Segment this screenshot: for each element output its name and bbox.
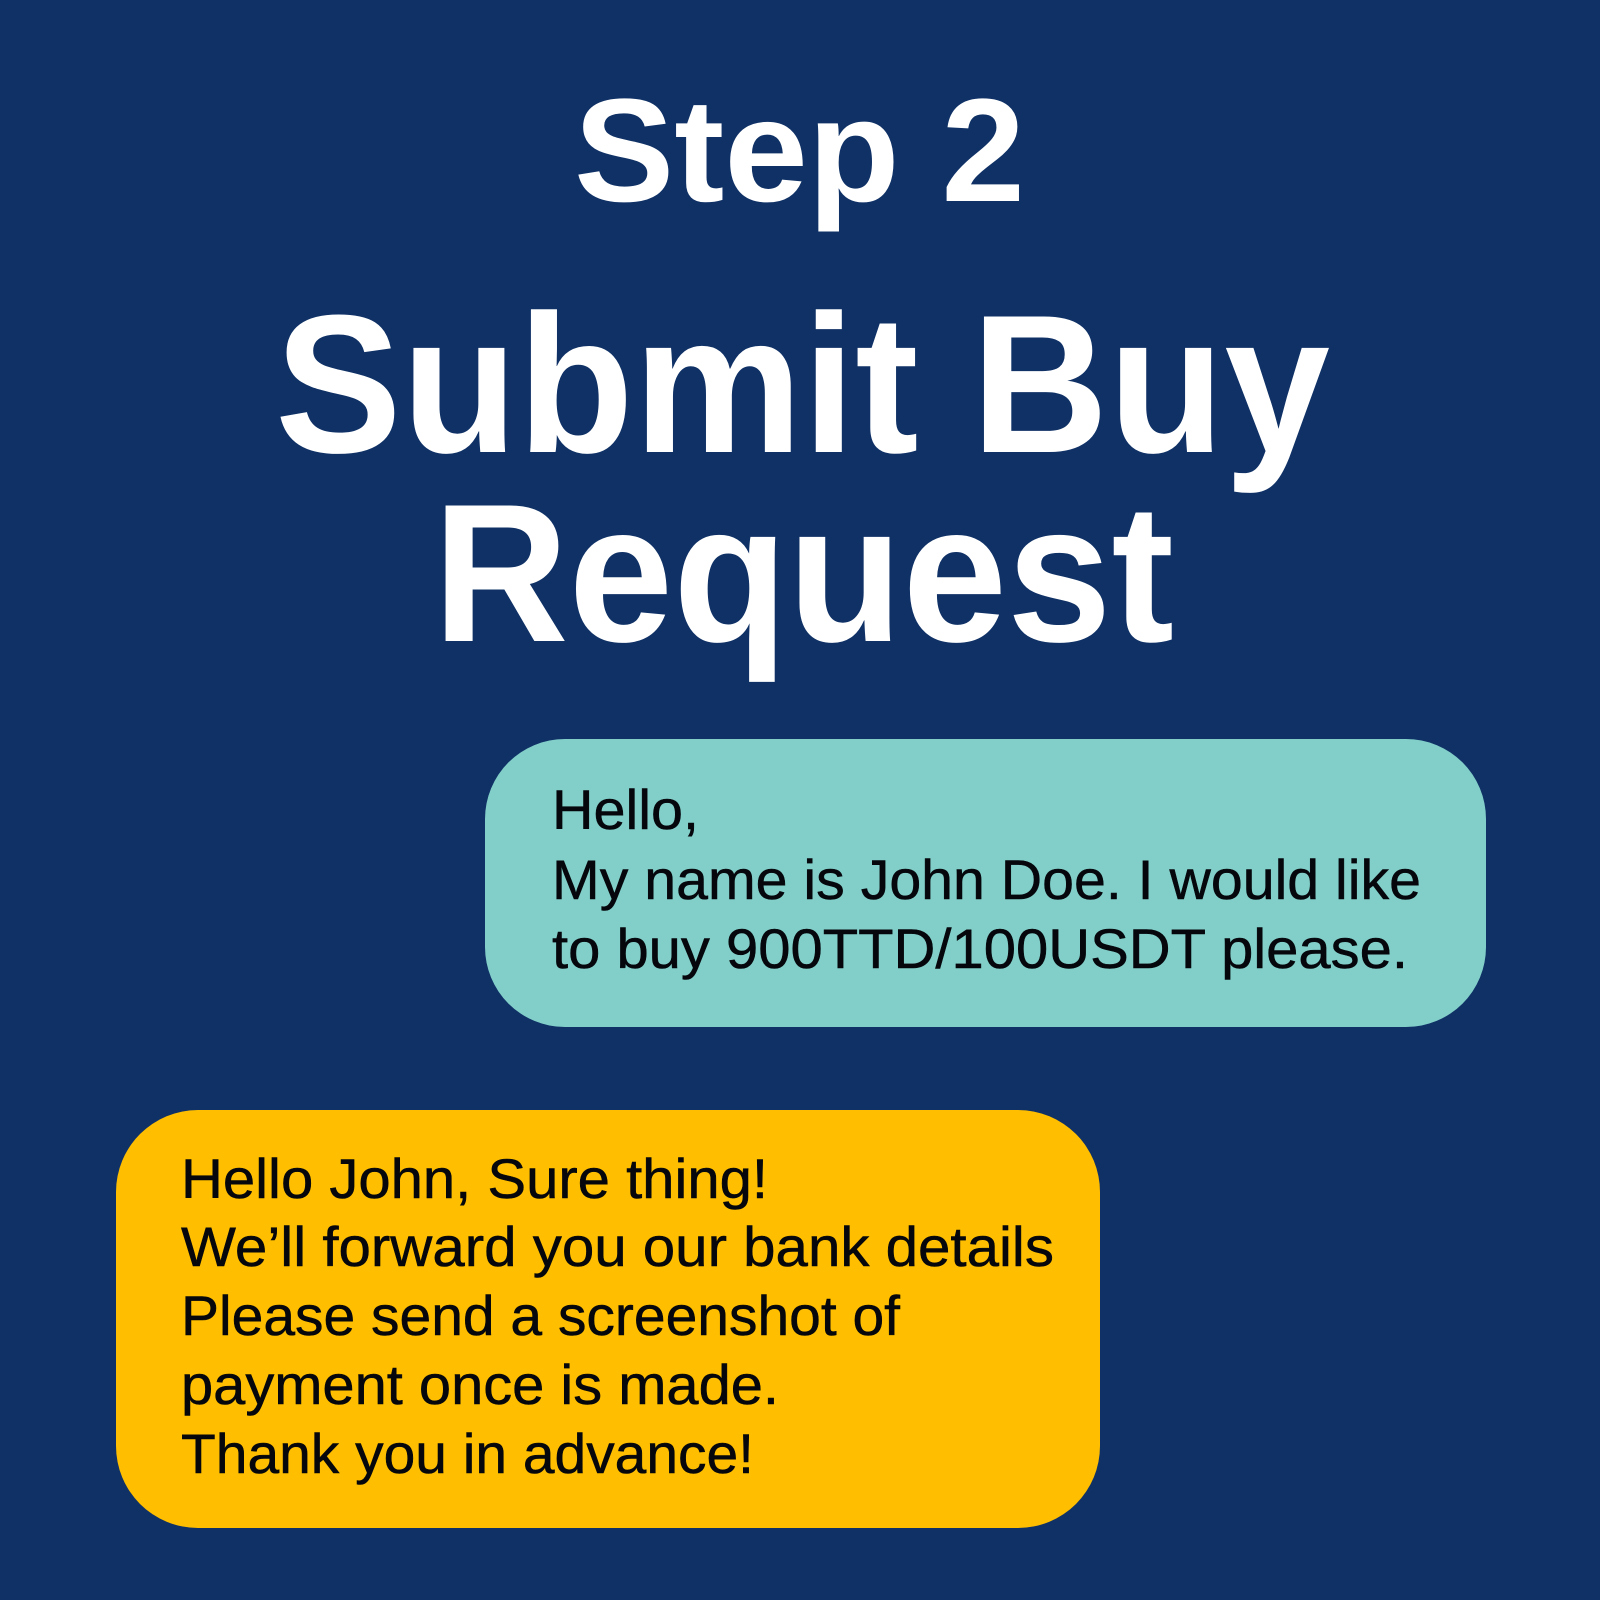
seller reply text: payment once is made. — [181, 1353, 779, 1416]
seller reply text: Please send a screenshot of — [181, 1284, 900, 1347]
panel: seller reply bubble — [116, 1110, 1100, 1528]
customer message text: to buy 900TTD/100USDT please. — [552, 917, 1408, 980]
title — [275, 274, 1330, 683]
heading: step number: Step 2 — [574, 69, 1025, 233]
panel: customer message bubble — [485, 739, 1486, 1027]
seller reply text — [181, 1147, 1054, 1485]
title: Submit Buy — [275, 274, 1330, 494]
customer message text: Hello, — [552, 778, 699, 841]
seller reply text: Hello John, Sure thing! — [181, 1147, 768, 1210]
seller reply text: We’ll forward you our bank details — [181, 1215, 1054, 1278]
title: Request — [433, 463, 1174, 683]
seller reply text: Thank you in advance! — [181, 1422, 754, 1485]
customer message text: My name is John Doe. I would like — [552, 848, 1421, 911]
customer message text — [552, 778, 1421, 980]
